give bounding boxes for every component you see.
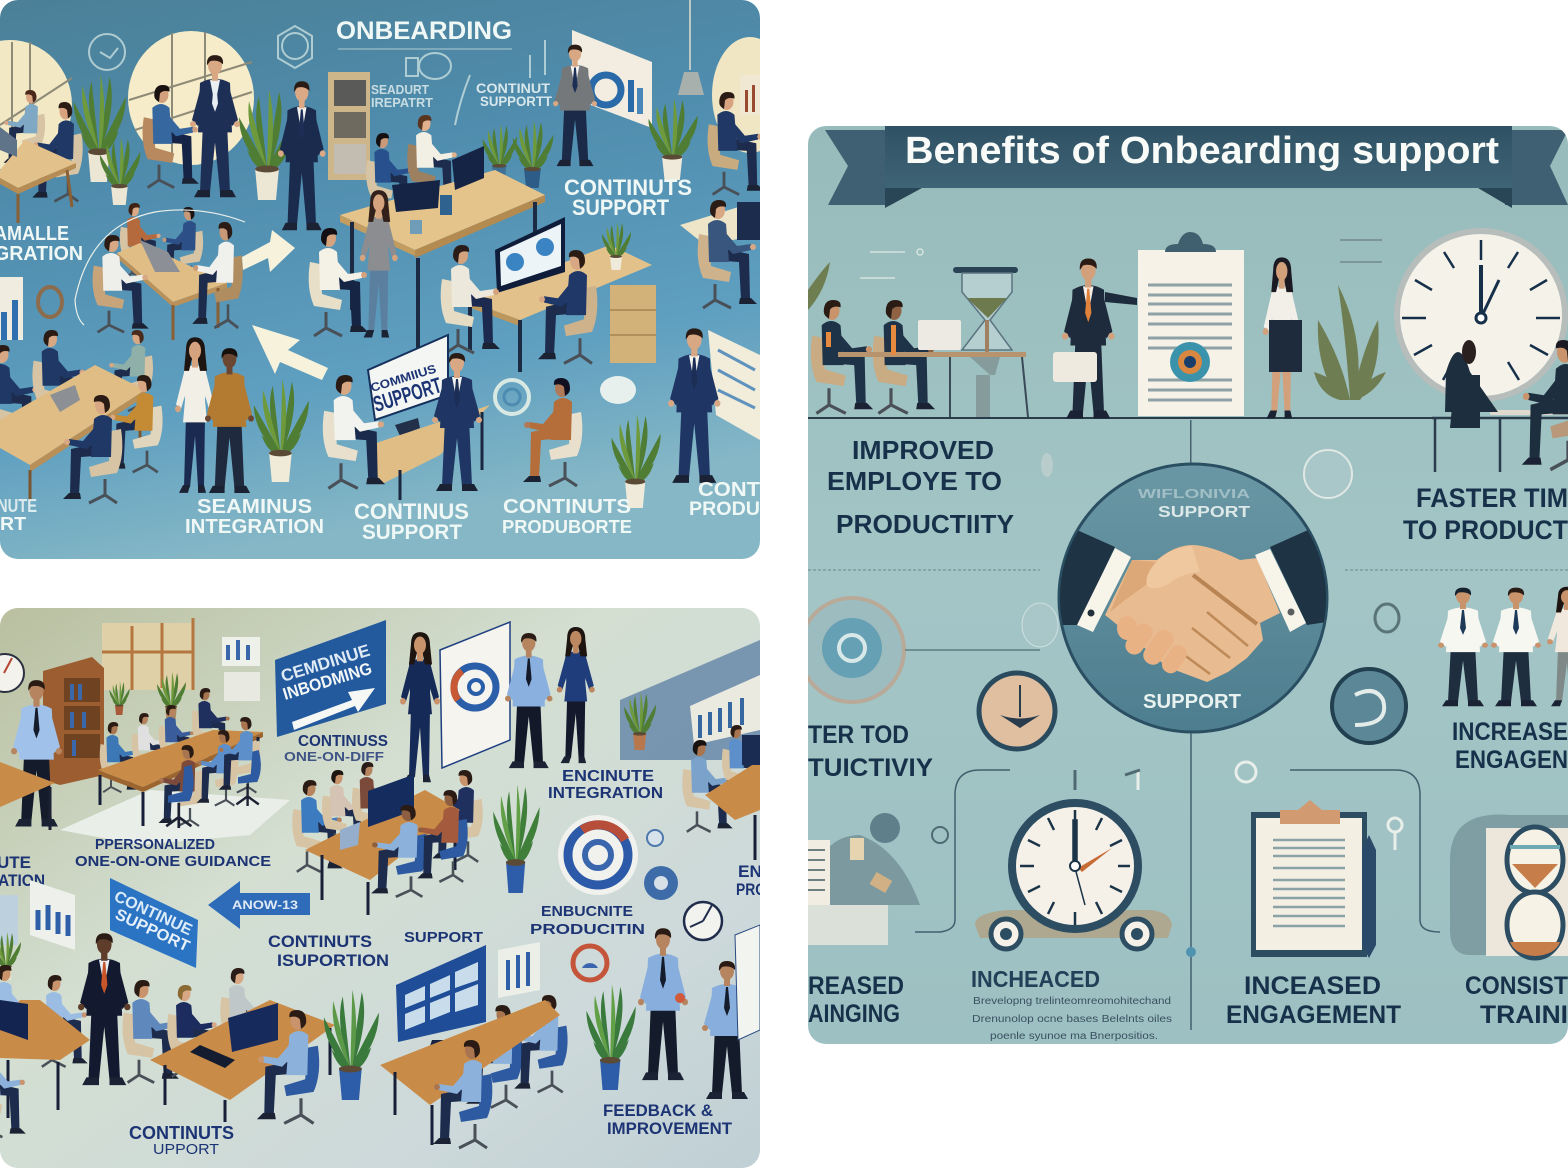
- label: consistent training: TRAINI: [1480, 1001, 1568, 1029]
- right top worker and chart: [708, 75, 764, 195]
- bottom labels: SUPPORT: [362, 521, 462, 544]
- label: improved employee productivity: IMPROVED: [852, 435, 994, 465]
- label: ter tod tuictivity: [808, 721, 933, 782]
- small clock left of circle: [979, 673, 1055, 749]
- bottom labels: CONT: [698, 479, 760, 501]
- presenter right: [668, 328, 760, 483]
- monitor with tiles: [396, 945, 486, 1052]
- heading label: continuts support: [564, 180, 692, 215]
- right edge group: [682, 725, 763, 860]
- labels: seadurt, continut support: [371, 84, 552, 107]
- blue sign: continue support: CONTINUE: [111, 888, 195, 939]
- emblem icons at top: [89, 26, 545, 125]
- swoosh ring and chart icon: [0, 210, 245, 340]
- ribbon banner: [825, 126, 1568, 208]
- support monitor: SUPPORT: [370, 372, 445, 417]
- center connector top: [1190, 420, 1192, 470]
- standing man with folder: [11, 680, 62, 826]
- bottom labels: CONTINUS: [354, 499, 469, 524]
- label: continuts upport: [129, 1123, 234, 1158]
- label: increased engagement right: [1452, 718, 1568, 774]
- label: ute ation: [0, 853, 45, 890]
- hourglass panel right: [1450, 815, 1568, 958]
- left top desk and workers: [0, 90, 83, 223]
- panel: benefits of onboarding support: [800, 126, 1568, 1044]
- floor light patch: [60, 790, 290, 845]
- plant center: [493, 785, 540, 893]
- label: incheaced with body: Brevelopng trelinteomreomohitechand: [973, 996, 1171, 1007]
- title: Benefits of Onbearding support: [905, 130, 1499, 172]
- right desk scene: [441, 217, 656, 372]
- label: encinute integration: [548, 768, 663, 802]
- arrow: anow-13: ANOW-13: [232, 898, 298, 912]
- panel: continuing onboarding scene: [0, 608, 766, 1168]
- label: continuss one-on: [284, 733, 388, 764]
- connector lines: [915, 733, 1440, 1030]
- labels: seadurt, continut support: SUPPORTT: [480, 93, 552, 109]
- blue sign: continue support: [110, 878, 198, 968]
- support monitor: [366, 334, 449, 436]
- couple talking: [175, 337, 254, 493]
- label: en pro: PRO: [736, 880, 766, 899]
- label: improved employee productivity: EMPLOYE TO: [827, 466, 1002, 496]
- hourglass left: [953, 267, 1018, 417]
- clock icon: [684, 902, 722, 940]
- label: reased ainging: REASED: [808, 972, 904, 1000]
- blue sign: continue support: SUPPORT: [112, 906, 192, 956]
- label: enbucnite producitin: PRODUCITIN: [530, 921, 645, 938]
- woman seated and man standing at window: [143, 55, 240, 197]
- central circle with handshake: SUPPORT: [1143, 691, 1241, 713]
- label: improved employee productivity: PRODUCTIITY: [836, 509, 1014, 539]
- presenter board and people: [400, 622, 595, 782]
- labels: seadurt, continut support: CONTINUT: [476, 80, 550, 96]
- large clock on car: [975, 803, 1172, 949]
- lower left chart: [0, 880, 75, 950]
- label: personalized guidance: [75, 836, 271, 870]
- label: incheaced with body: poenle syunoe ma Bnerpositios.: [990, 1031, 1158, 1042]
- man presenting with briefcase: [1053, 258, 1137, 419]
- window and wall: [102, 618, 260, 701]
- labels: seadurt, continut support: IREPATRT: [371, 95, 433, 110]
- gear icons: [644, 830, 678, 900]
- label: reased ainging: AINGING: [808, 1000, 900, 1028]
- label: inceased engagement: [1226, 972, 1401, 1029]
- two seated people and desk: [811, 300, 1028, 417]
- blue sign: cemdinue inbodming: CEMDINUE: [279, 641, 372, 686]
- label: continuss one-on: CONTINUSS: [298, 733, 388, 750]
- label: incheaced with body: INCHEACED: [971, 966, 1100, 992]
- windows: [0, 31, 788, 170]
- label: inceased engagement: ENGAGEMENT: [1226, 1001, 1401, 1029]
- left documents icon: [808, 813, 920, 945]
- small target: [573, 946, 607, 980]
- woman's skirt: [1269, 320, 1302, 372]
- label: feedback improvement: [603, 1101, 733, 1138]
- right edge worker: [680, 200, 760, 308]
- bottom labels: SEAMINUS: [197, 496, 312, 518]
- central circle with handshake: SUPPORT: [1158, 504, 1250, 521]
- clipboard with pen: [1251, 800, 1376, 958]
- lower middle table group: [123, 968, 335, 1123]
- label: amalle gration: [0, 226, 82, 260]
- label: ter tod tuictivity: TUICTIVIY: [808, 754, 933, 782]
- label: personalized guidance: PPERSONALIZED: [95, 836, 215, 853]
- small deco above: [860, 240, 1382, 278]
- label: feedback improvement: IMPROVEMENT: [607, 1119, 733, 1138]
- bottom left meeting group: [0, 330, 163, 503]
- presenter and board: [553, 30, 652, 166]
- heading: onbearding: ONBEARDING: [336, 17, 512, 45]
- right lower table group: [380, 995, 568, 1148]
- label: inceased engagement: INCEASED: [1244, 972, 1381, 1000]
- plants upper left: [74, 74, 297, 205]
- doc clipboard with target: [1138, 232, 1244, 416]
- bottom labels: CONTINUTS: [503, 496, 631, 518]
- label: continuts isuportion: CONTINUTS: [268, 932, 372, 951]
- label: personalized guidance: ONE-ON-ONE GUIDANCE: [75, 853, 271, 870]
- bookshelf: [43, 657, 104, 785]
- plant right: [586, 984, 636, 1090]
- bottom labels: PRODUBORTE: [502, 517, 632, 537]
- central circle with handshake: WIFLONIVIA: [1138, 486, 1251, 501]
- bar chart icon: [498, 942, 540, 998]
- small plants middle top: [482, 121, 553, 188]
- labels: seadurt, continut support: SEADURT: [371, 82, 429, 97]
- small pin decorations: [932, 762, 1402, 850]
- plant lower center: [324, 990, 379, 1100]
- label: enbucnite producitin: [530, 903, 645, 938]
- label: continuts upport: CONTINUTS: [129, 1123, 234, 1143]
- label: continuts isuportion: ISUPORTION: [277, 951, 389, 970]
- panel: onboarding office scene: [0, 0, 788, 559]
- arrow: right pointing: [242, 230, 295, 272]
- label: consistent training: [1465, 972, 1568, 1029]
- support monitor: COMMIIUS: [369, 362, 438, 395]
- desk left edge: [0, 762, 55, 830]
- bottom labels: INTEGRATION: [185, 516, 324, 538]
- dot on center line: [1186, 947, 1196, 957]
- heading label: continuts support: CONTINUTS: [564, 175, 692, 200]
- seated woman in brown: [495, 376, 636, 486]
- floor line: [808, 417, 1568, 419]
- heading label: continuts support: SUPPORT: [572, 195, 670, 220]
- table and women by clock: [1432, 340, 1568, 472]
- label: continuts isuportion: [268, 932, 389, 970]
- plant bottom right: [611, 414, 661, 508]
- label: support: SUPPORT: [404, 929, 483, 946]
- label: en pro: EN: [738, 862, 762, 881]
- label: incheaced with body: Drenunolop ocne bases Belelnts oiles: [972, 1014, 1172, 1025]
- bottom labels: [0, 482, 760, 539]
- label: continuss one-on: ONE-ON-DIFF: [284, 749, 384, 764]
- small dial right of circle: [1332, 669, 1406, 743]
- standing man with plant: [278, 81, 326, 230]
- target icon: [558, 815, 638, 895]
- label: encinute integration: INTEGRATION: [548, 785, 663, 802]
- label: ter tod tuictivity: TER TOD: [808, 721, 909, 749]
- label: feedback improvement: FEEDBACK &: [603, 1101, 713, 1120]
- large wall clock: [1397, 231, 1565, 399]
- centre top desk group: [340, 115, 545, 350]
- team of three holding hands: [1438, 587, 1568, 706]
- label: incheaced with body: [971, 966, 1172, 1042]
- meeting table group: [93, 203, 243, 340]
- olive plant: [1314, 285, 1386, 400]
- right deco: [1022, 450, 1399, 647]
- blue sign: cemdinue inbodming: [275, 620, 386, 737]
- blue sign: cemdinue inbodming: INBODMING: [281, 659, 374, 704]
- desk and two men: [323, 353, 490, 500]
- plant center bottom: [254, 379, 309, 482]
- label: faster time to productivity: [1403, 483, 1568, 545]
- label: enbucnite producitin: ENBUCNITE: [541, 903, 633, 920]
- standing woman and seated woman: [309, 190, 398, 337]
- label: improved employee productivity: [827, 435, 1014, 539]
- bottom labels: PRODU: [689, 499, 760, 520]
- arrow: anow-13: [208, 881, 310, 929]
- central table group: [292, 762, 483, 915]
- section dashes: [808, 569, 1568, 571]
- wall clock left: [0, 654, 24, 692]
- central circle with handshake: [1050, 464, 1340, 732]
- arrow: big up-left: [252, 325, 328, 380]
- lower left group: [0, 932, 131, 1137]
- label: reased ainging: [808, 972, 904, 1028]
- bottom labels: RT: [0, 514, 26, 534]
- woman standing: [1263, 257, 1301, 419]
- left ring medallion: [800, 598, 1040, 702]
- label: continuts upport: UPPORT: [153, 1141, 219, 1158]
- plant and lamp on right: [648, 0, 704, 180]
- two men shaking hands: [638, 925, 760, 1099]
- bookshelf: [328, 72, 370, 180]
- label: en pro: [736, 862, 766, 899]
- leaf left: [808, 262, 830, 310]
- back left table group: [98, 672, 263, 828]
- right wall chart: [620, 640, 760, 760]
- label: encinute integration: ENCINUTE: [562, 768, 654, 785]
